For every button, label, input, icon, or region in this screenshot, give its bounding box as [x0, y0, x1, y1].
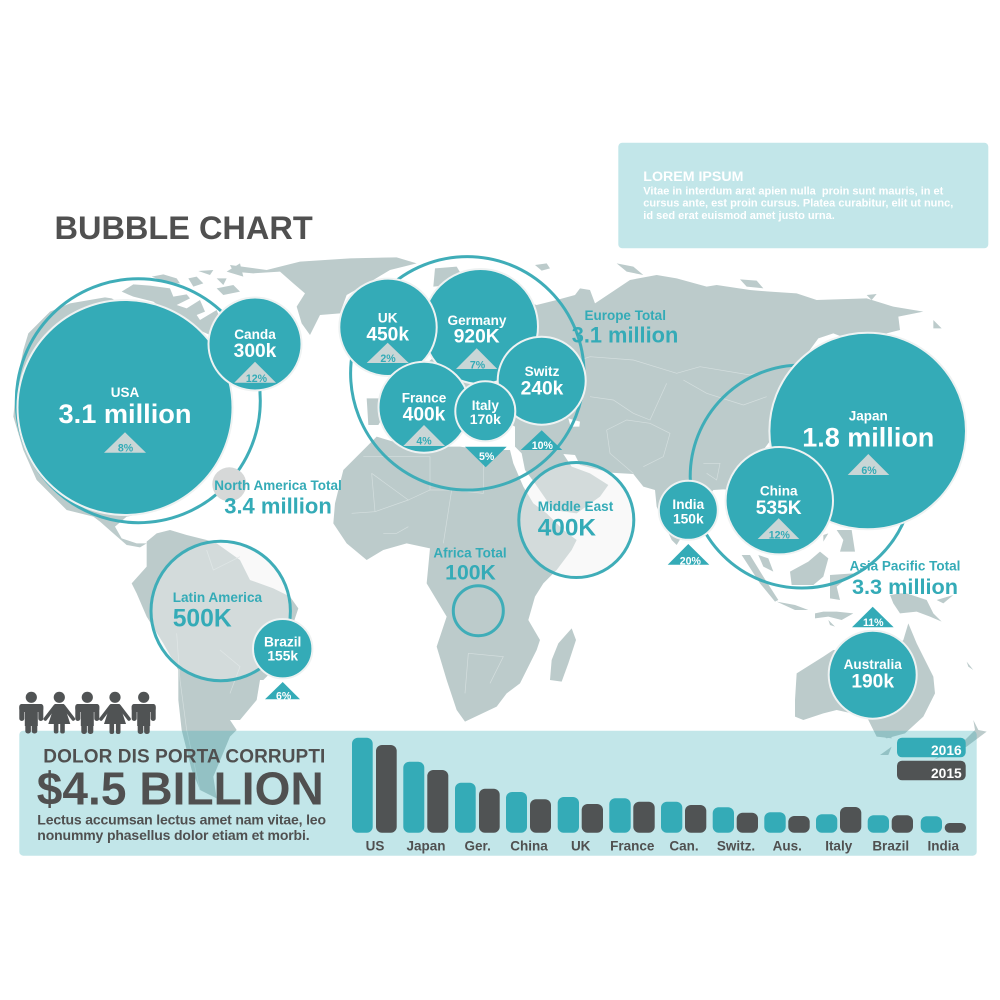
bubble: Switzerland: [498, 337, 586, 452]
panel: lorem ipsum: Vitae in interdum arat apien nulla proin sunt mauris, in et: [643, 185, 944, 197]
bubble: Italy: [455, 381, 515, 467]
bubble: USA: 3.1 million: [59, 398, 191, 429]
bubble: Canada: 300k: [234, 341, 277, 362]
badge: USA 8%: [104, 432, 146, 454]
icon: woman: [45, 692, 73, 734]
bubble: Latin America total: Latin America: [173, 590, 263, 605]
bubble: Middle East: [519, 462, 634, 578]
label: Asia Pacific total: [850, 559, 960, 599]
icon: man: [132, 692, 156, 734]
bubble: China: [726, 447, 833, 554]
badge: India 20%: 20%: [680, 555, 701, 567]
bubble: Germany: 920K: [454, 327, 500, 348]
bar chart axis labels: Italy: [825, 839, 853, 854]
badge: Japan 6%: [848, 454, 889, 477]
legend: [897, 738, 966, 781]
heading: dolor dis porta corrupti: DOLOR DIS PORTA CORRUPTI: [43, 747, 325, 768]
bar chart axis labels: US: [366, 839, 384, 854]
bubble: India: India: [672, 497, 705, 512]
bubble: UK: 450k: [366, 325, 409, 346]
bubble: UK: UK: [378, 310, 398, 325]
label: Europe total: Europe Total: [584, 308, 666, 323]
ring: Asia Pacific total: [690, 365, 913, 588]
legend: 2016: [931, 743, 962, 758]
big number: $4.5 BILLION: [37, 762, 324, 814]
badge: Germany 7%: 7%: [470, 359, 486, 371]
bar chart axis labels: China: [510, 839, 548, 854]
bubble: Brazil: Brazil: [264, 635, 301, 650]
description: nonummy phasellus dolor etiam et morbi.: [37, 827, 310, 843]
bar chart axis labels: Aus.: [773, 839, 802, 854]
bubble: Canada: Canda: [234, 327, 276, 342]
bar chart axis labels: [366, 839, 960, 854]
panel: lorem ipsum: [618, 143, 988, 248]
bar chart axis labels: Japan: [406, 839, 446, 854]
badge: USA 8%: 8%: [118, 442, 134, 454]
badge: France 4%: 4%: [416, 436, 432, 448]
panel: lorem ipsum: LOREM IPSUM: [643, 169, 743, 185]
panel: lorem ipsum: cursus ante, est proin cursus. Platea curabitur, elit ut nunc,: [643, 198, 953, 210]
bubble: Latin America total: [151, 541, 290, 681]
bubble: Japan: 1.8 million: [802, 423, 934, 453]
icon: man: [75, 692, 99, 734]
badge: Brazil 6%: 6%: [276, 690, 292, 702]
bubble: China: China: [760, 484, 798, 499]
Eurasia: [400, 275, 923, 545]
bubble: Germany: [423, 269, 538, 384]
grey marker disc: [212, 467, 246, 501]
panel: lorem ipsum: id sed erat euismod amet justo urna.: [643, 210, 835, 222]
label: Africa total: Africa Total: [433, 545, 507, 560]
bubble: Middle East: 400K: [538, 514, 596, 541]
bubble: Latin America total: 500K: [173, 606, 232, 633]
bubble: India: 150k: [673, 511, 704, 526]
bubble: Switzerland: Switz: [525, 364, 560, 379]
label: Asia Pacific total: Asia Pacific Total: [850, 559, 960, 574]
badge: Canada 12%: 12%: [246, 373, 268, 385]
icon: man: [19, 692, 43, 734]
bubble: Brazil: [253, 619, 312, 702]
description: Lectus accumsan lectus amet nam vitae, leo: [37, 812, 326, 828]
bar chart axis labels: France: [610, 839, 655, 854]
bar chart axis labels: Ger.: [465, 839, 491, 854]
bubble: North America total ring: [16, 279, 260, 523]
bar chart axis labels: Can.: [669, 839, 699, 854]
bar chart axis labels: India: [928, 839, 960, 854]
icon: woman: [101, 692, 129, 734]
bubble: Italy: Italy: [472, 398, 499, 413]
ring: Europe total: [351, 257, 584, 490]
bubble: USA: [18, 300, 232, 515]
bubble: Canada: [208, 298, 302, 390]
label: Europe total: [572, 308, 678, 348]
bubble: Australia: Australia: [844, 657, 902, 672]
description: [37, 812, 326, 843]
bubble: Italy: 170k: [470, 411, 501, 427]
panel: revenue summary: [19, 731, 977, 856]
label: Africa total: 100K: [445, 561, 497, 584]
label: North America total: [214, 478, 342, 518]
ring: Africa total: [453, 586, 503, 636]
bubble: USA: USA: [111, 385, 139, 400]
bubble: Australia: [829, 607, 917, 719]
label: North America total: 3.4 million: [224, 493, 332, 518]
label: North America total: North America Total: [214, 478, 342, 493]
icon: row of people: [19, 692, 156, 734]
bubble: Middle East: Middle East: [538, 499, 614, 514]
bubble: India: [659, 481, 718, 567]
label: Europe total: 3.1 million: [572, 323, 678, 348]
badge: Switzerland 10%: 10%: [532, 440, 553, 452]
bar chart axis labels: Switz.: [717, 839, 755, 854]
badge: Japan 6%: 6%: [861, 465, 877, 477]
bubble: China: 535K: [756, 498, 802, 519]
bubble: Japan: [769, 333, 966, 529]
legend: 2015: [931, 766, 962, 781]
badge: Italy 5%: 5%: [479, 451, 495, 463]
world map: [13, 257, 987, 798]
bar chart axis labels: Brazil: [872, 839, 909, 854]
bubble: France: [378, 362, 470, 453]
bubble: Brazil: 155k: [267, 649, 298, 664]
bubble: Germany: Germany: [448, 313, 507, 328]
title: BUBBLE CHART: [54, 210, 313, 246]
bar chart: [352, 738, 966, 833]
badge: China 12%: 12%: [769, 529, 790, 541]
badge: UK 2%: 2%: [380, 353, 396, 365]
bubble: France: 400k: [403, 405, 446, 426]
bubble: UK: [339, 279, 437, 376]
label: Asia Pacific total: 3.3 million: [852, 574, 958, 599]
bubble: Japan: Japan: [849, 409, 888, 424]
bubble: Australia: 190k: [851, 671, 894, 692]
bubble: Switzerland: 240k: [521, 378, 564, 399]
bar chart axis labels: UK: [571, 839, 591, 854]
badge: Australia 11%: 11%: [863, 617, 884, 629]
label: Africa total: [433, 545, 507, 584]
bubble: France: France: [402, 391, 447, 406]
